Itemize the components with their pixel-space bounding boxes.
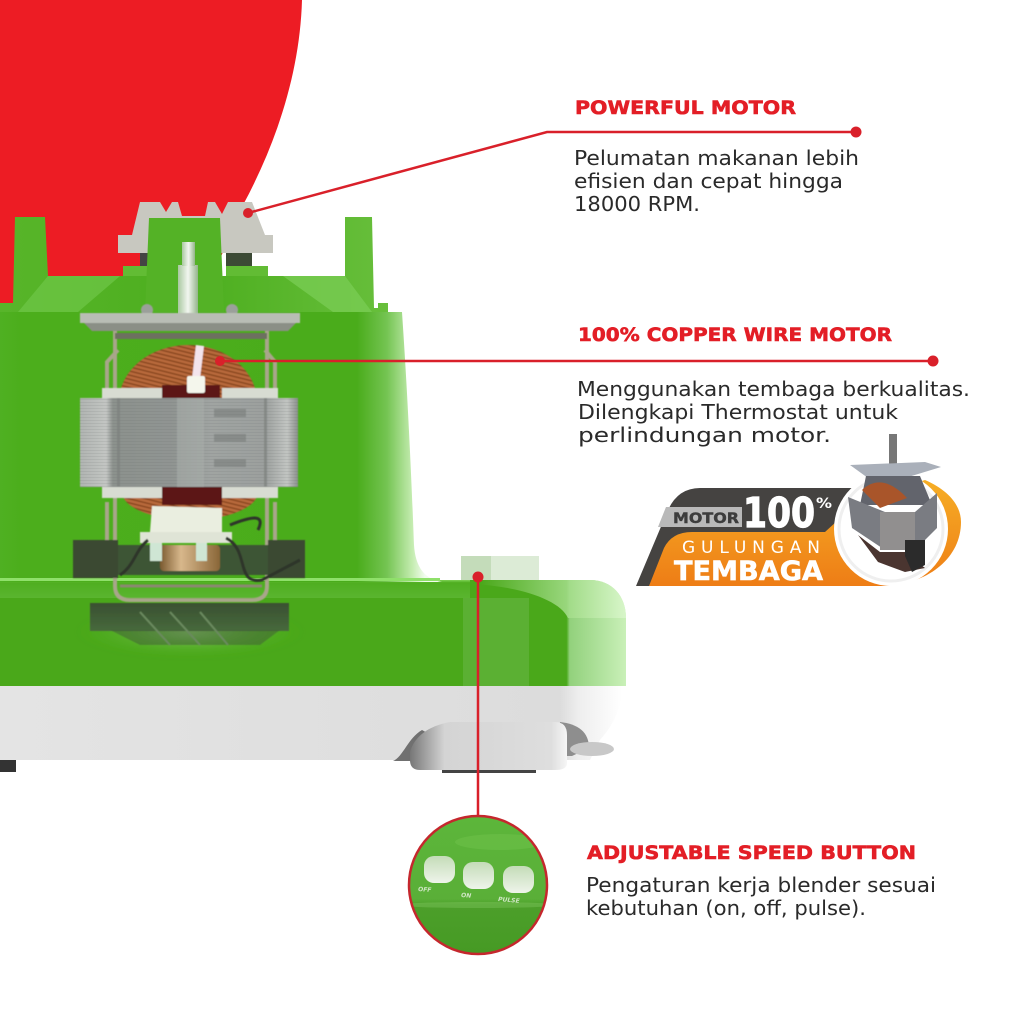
zoom circle: speed buttons [398,816,558,954]
text: powerful motor description: Pelumatan makanan lebih [574,146,859,170]
badge 100 percent: 100 [743,489,815,537]
button labels: ON [461,892,471,900]
heading: powerful motor: POWERFUL MOTOR [575,97,796,119]
text: copper wire description: Dilengkapi Thermostat untuk [578,400,898,424]
heading: adjustable speed button: ADJUSTABLE SPEED BUTTON [587,842,916,864]
motor frame [107,331,275,600]
badge dark banner [636,488,860,586]
green base housing [0,580,626,686]
on button [463,862,494,889]
badge motor image [848,434,941,572]
badge tembaga: TEMBAGA [674,556,823,587]
green motor housing [0,312,442,582]
thermostat [140,506,232,561]
badge: motor 100% gulungan tembaga [636,434,961,587]
text: copper wire description: Menggunakan tembaga berkualitas. [577,377,970,401]
commutator [160,545,220,571]
motor [73,304,305,658]
off button [424,856,455,883]
black wires [120,518,300,580]
text: copper wire description: perlindungan motor. [578,423,831,447]
text: powerful motor description: 18000 RPM. [574,192,700,216]
button labels: PULSE [498,896,521,905]
red background shape [0,0,302,306]
blender product cutaway [0,202,626,773]
text: powerful motor description [574,146,859,216]
cable tie [187,345,205,393]
text: copper wire description [577,377,970,447]
heading: copper wire motor: 100% COPPER WIRE MOTOR [578,324,892,346]
black brush holder [73,540,305,578]
copper coil bottom [122,464,258,520]
badge white circle [834,472,948,586]
coupling [118,202,273,266]
badge motor tag: MOTOR [673,511,739,527]
cone top and posts [0,217,388,312]
center column [145,218,224,312]
badge orange ring [649,480,961,586]
pulse button [503,866,534,893]
cooling fan [75,603,305,658]
top button stub [461,556,539,582]
callout line: speed button [472,572,484,820]
badge motor tag [658,507,742,527]
text: powerful motor description: efisien dan cepat hingga [574,169,843,193]
rubber foot [393,722,614,773]
plastic bobbin strips [102,388,278,498]
text: speed button description: Pengaturan kerja blender sesuai [586,873,936,897]
text: speed button description [586,873,936,920]
dark corner under base [0,760,16,772]
text: speed button description: kebutuhan (on, off, pulse). [586,896,866,920]
callout line: powerful motor [243,126,862,218]
badge 100 percent: % [816,496,832,512]
motor shaft [178,242,198,321]
callout line: copper wire [215,356,938,366]
laminated stator [80,398,298,487]
button labels [418,886,521,905]
mounting plate [80,304,300,331]
button labels: OFF [418,886,433,894]
badge gulungan: GULUNGAN [682,538,820,558]
copper coil top [119,345,257,459]
white lower base [0,684,622,760]
